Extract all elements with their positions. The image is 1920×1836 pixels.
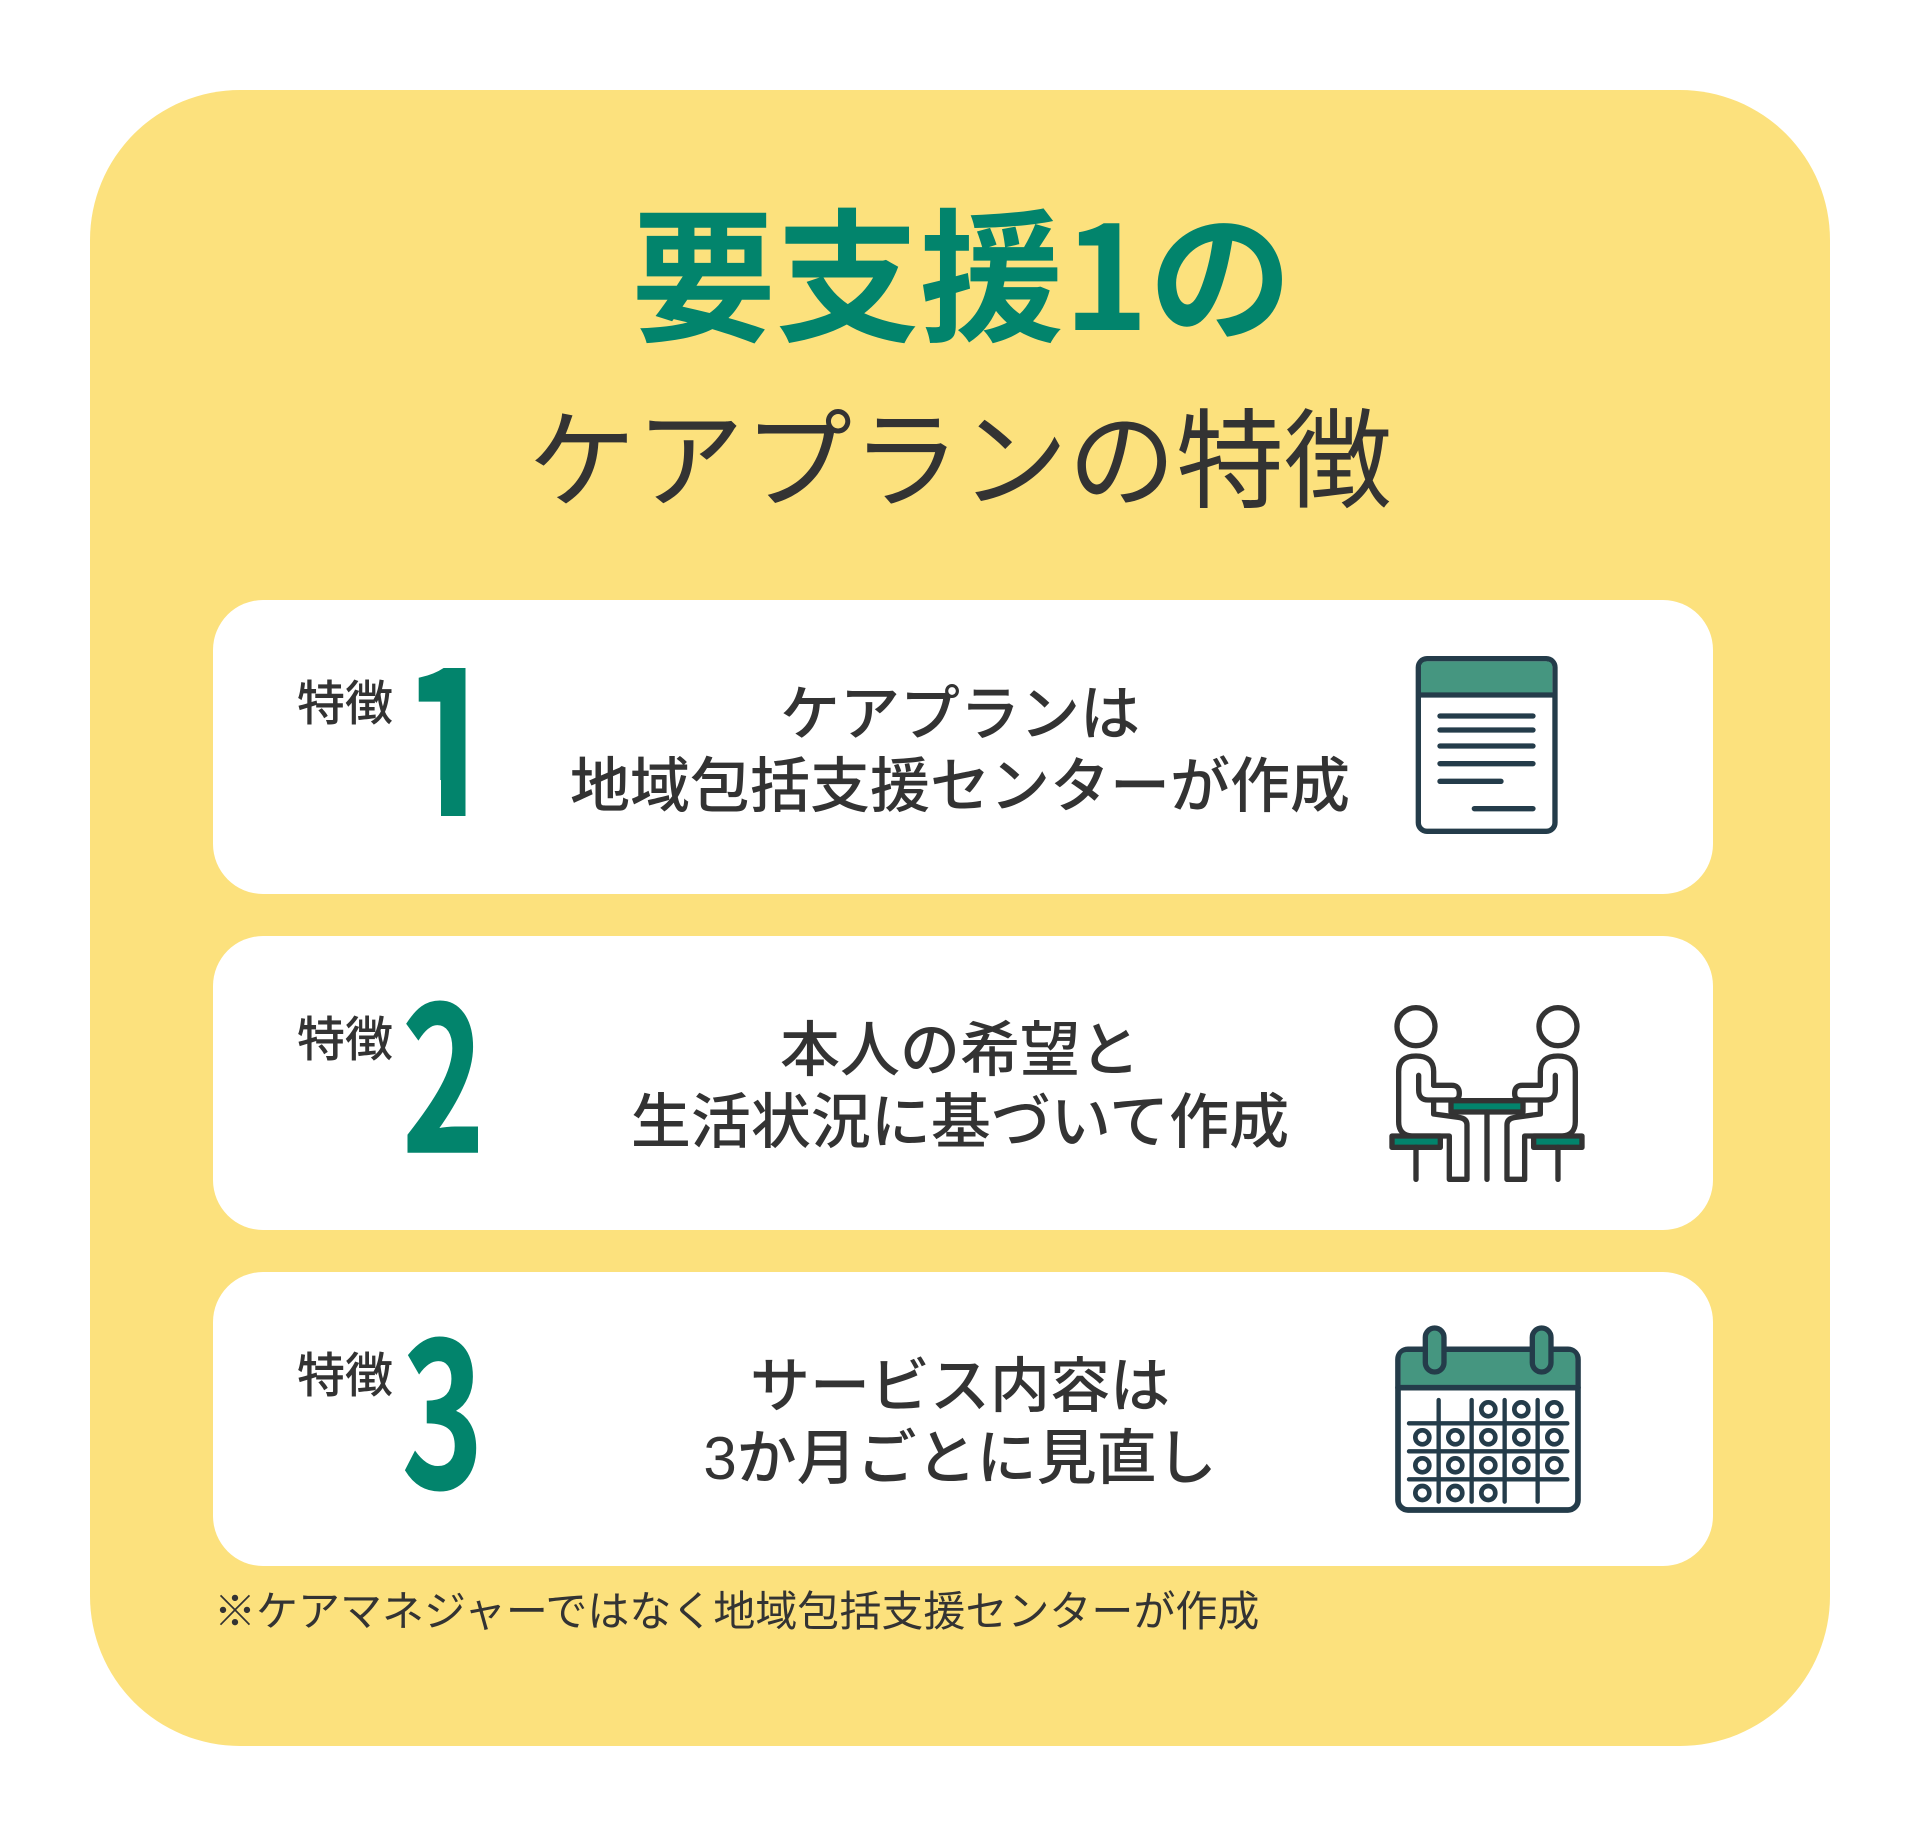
- panel: feature 3: [213, 1258, 1713, 1566]
- label: 特徴: 特徴: [297, 664, 393, 734]
- number 2: 2: [402, 920, 485, 1210]
- feature 2 text: 生活状況に基づいて作成: [631, 1089, 1289, 1156]
- table: [1451, 1101, 1523, 1179]
- footnote: ※ケアマネジャーではなく地域包括支援センターが作成: [214, 1578, 1259, 1639]
- feature 3 text: 3か月ごとに見直し: [703, 1425, 1217, 1492]
- left person: [1392, 1008, 1467, 1179]
- feature 1 text: [570, 681, 1350, 820]
- icon: calendar: [1398, 1328, 1578, 1510]
- feature 3 text: サービス内容は: [750, 1353, 1170, 1420]
- feature 2 text: 本人の希望と: [780, 1017, 1140, 1084]
- icon: document: [1418, 659, 1555, 831]
- subtitle: ケアプランの特徴: ケアプランの特徴: [528, 375, 1392, 531]
- panel: feature 1: [213, 585, 1713, 894]
- feature 1 text: ケアプランは: [780, 681, 1140, 748]
- number 1: 1: [404, 585, 498, 875]
- feature 2 text: [631, 1017, 1289, 1156]
- icon: two people at a table: [1392, 1008, 1582, 1179]
- number 3: 3: [402, 1258, 483, 1546]
- panel: feature 2: [213, 920, 1713, 1230]
- feature 1 text: 地域包括支援センターが作成: [570, 753, 1350, 820]
- title: 要支援1の: 要支援1の: [632, 164, 1292, 372]
- right person: [1507, 1008, 1582, 1179]
- feature 3 text: [703, 1353, 1217, 1492]
- label: 特徴: 特徴: [297, 1000, 393, 1070]
- label: 特徴: 特徴: [297, 1336, 393, 1406]
